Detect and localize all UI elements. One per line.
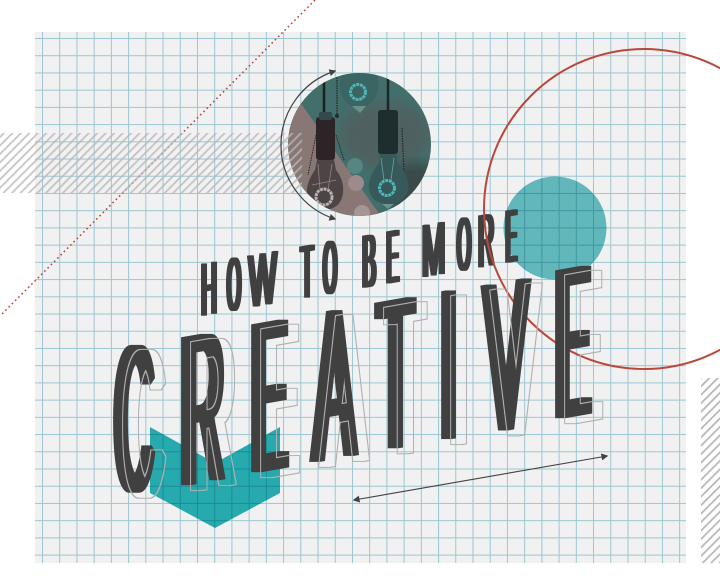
photo circle: hanging light bulbs <box>288 73 431 216</box>
heading: how to be more: B <box>362 217 376 304</box>
heading: how to be more: O <box>323 224 337 311</box>
red circle outline <box>484 49 720 369</box>
teal circle <box>504 176 606 280</box>
heading: how to be more: M <box>422 206 445 295</box>
heading: how to be more: E <box>386 213 399 300</box>
title: creative solid letters: E <box>252 273 286 520</box>
heading: how to be more: T <box>301 228 314 315</box>
teal chevron <box>150 427 280 528</box>
top bulb <box>335 73 378 118</box>
title: creative solid letters: V <box>485 231 527 480</box>
right bulb <box>369 70 408 209</box>
curved double arrow around photo <box>281 71 335 219</box>
heading: how to be more: E <box>506 192 517 280</box>
heading: how to be more: W <box>249 236 277 325</box>
double-headed arrow under title <box>354 456 607 500</box>
title: creative solid letters: E <box>556 220 589 466</box>
hatched band left <box>0 133 302 193</box>
title: creative solid letters: I <box>441 244 456 487</box>
title: creative outlined offset letters: I <box>451 249 466 492</box>
title: creative outlined offset letters: R <box>191 290 233 537</box>
title: creative outlined offset letters: E <box>262 278 296 525</box>
title: creative outlined offset letters: A <box>324 267 364 513</box>
title: creative outlined offset letters: V <box>495 236 537 485</box>
heading: how to be more: O <box>457 200 471 288</box>
heading: how to be more: O <box>227 240 241 328</box>
left bulb <box>307 70 344 210</box>
heading: how to be more: H <box>201 245 217 332</box>
title: creative solid letters: T <box>378 251 413 497</box>
title: creative outlined offset letters <box>126 225 599 544</box>
title: creative solid letters: C <box>116 300 152 539</box>
red dotted diagonal line <box>0 0 315 316</box>
title: creative solid letters <box>116 220 589 539</box>
title: creative solid letters: R <box>181 285 223 532</box>
title: creative outlined offset letters: E <box>566 225 599 471</box>
title: creative outlined offset letters: C <box>126 305 162 544</box>
heading: how to be more: R <box>478 197 494 284</box>
title: creative outlined offset letters: T <box>388 256 423 502</box>
hatched band right <box>701 378 720 563</box>
taupe diagonal panel <box>288 104 379 216</box>
title: creative solid letters: A <box>314 262 354 508</box>
heading: how to be more <box>201 192 517 332</box>
